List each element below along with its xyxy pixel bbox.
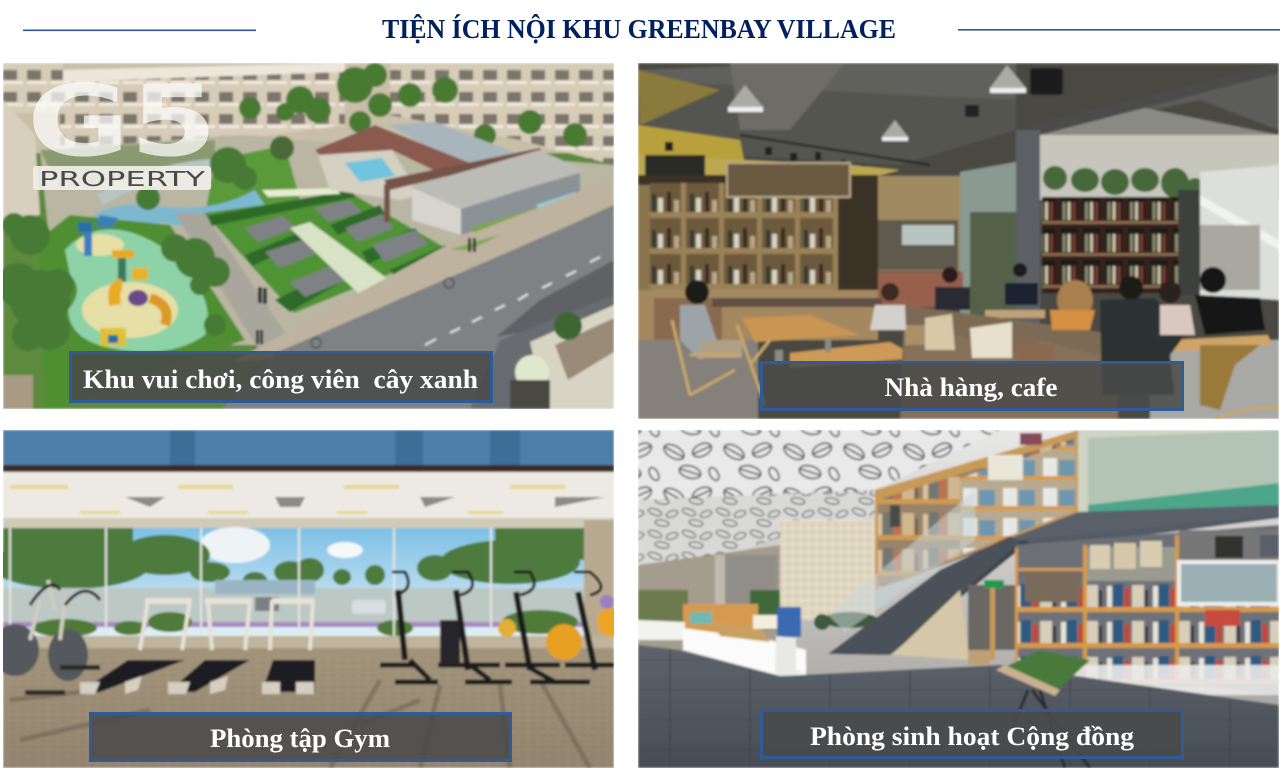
bottle garland — [1042, 164, 1202, 200]
track lights — [740, 135, 930, 165]
caption: Khu vui chơi, công viên cây xanh — [83, 365, 479, 394]
caption — [762, 710, 1182, 758]
sidewalk — [232, 178, 614, 362]
garden lawn — [204, 193, 449, 313]
road — [222, 206, 614, 409]
mezzanine glass and teal band — [1078, 430, 1279, 515]
exercise bikes — [0, 580, 100, 695]
exercise balls — [546, 624, 582, 660]
diners — [680, 263, 1265, 410]
wainscot and carpet — [3, 636, 614, 650]
mezzanine beam — [1012, 505, 1279, 552]
caption: Phòng sinh hoạt Cộng đồng — [810, 722, 1134, 751]
right title rule — [958, 29, 1280, 31]
slate floor — [638, 645, 1279, 768]
caption: Nhà hàng, cafe — [884, 373, 1058, 402]
stair glass — [828, 490, 975, 632]
ceiling — [638, 84, 1016, 164]
panel: community room — [638, 430, 1279, 768]
treadmills — [80, 598, 315, 694]
wine shelf — [1042, 197, 1178, 293]
stair shrub — [822, 612, 878, 628]
garden hedges and seating — [207, 188, 450, 312]
left title rule — [23, 30, 256, 31]
caption — [90, 714, 510, 760]
clubhouse with pool and glass dome — [270, 122, 584, 238]
pendant lamps — [728, 85, 763, 107]
caption — [70, 352, 492, 402]
playground equipment — [78, 215, 167, 346]
lower bookcase — [1015, 525, 1279, 695]
stone walkway — [175, 213, 290, 355]
ceiling — [3, 472, 614, 522]
tables — [742, 315, 860, 342]
playground surface — [65, 229, 208, 352]
caption — [762, 362, 1182, 410]
restaurant interior photo — [638, 63, 1280, 419]
aerial illustration of the park — [0, 63, 614, 409]
tree canopies — [0, 147, 257, 351]
open book on stand — [996, 650, 1090, 768]
stair — [832, 540, 1030, 655]
title: TIỆN ÍCH NỘI KHU GREENBAY VILLAGE — [382, 14, 896, 44]
blue facade band — [3, 430, 614, 466]
soffit lit wall — [638, 155, 900, 176]
gym interior render — [0, 430, 627, 768]
window bay — [960, 162, 1016, 340]
right window — [1200, 165, 1279, 300]
panel: restaurant and cafe — [638, 63, 1280, 419]
counter — [638, 290, 878, 340]
mullions — [9, 528, 492, 636]
back of hall — [638, 545, 780, 650]
wood panel — [878, 176, 960, 271]
floor — [638, 340, 758, 419]
pedestrians and cyclists — [256, 238, 476, 348]
leaf ceiling — [638, 430, 1000, 560]
orange display and white tables — [683, 604, 758, 634]
community library photo — [638, 430, 1279, 768]
rattan chairs — [672, 320, 1279, 419]
upper right wall — [1040, 135, 1280, 200]
background trees — [239, 63, 587, 147]
logo: G5 — [27, 65, 217, 179]
window view — [3, 528, 593, 636]
panel: gym — [0, 430, 627, 768]
water channel — [92, 188, 266, 226]
side lawn — [38, 215, 245, 409]
sofa with cushions — [901, 305, 1102, 361]
bar shelving — [638, 175, 878, 295]
upper bookcase — [875, 430, 1078, 590]
column — [1016, 130, 1040, 340]
dumbbell rack — [440, 620, 460, 665]
caption: Phòng tập Gym — [210, 724, 390, 753]
logo — [33, 82, 211, 190]
logo: PROPERTY — [39, 167, 206, 191]
under stair shelf and door — [892, 590, 970, 660]
pale ground — [40, 135, 614, 345]
steppers — [380, 572, 614, 682]
floor shadows — [10, 680, 590, 768]
corner villa and plant — [530, 305, 614, 409]
lane markings — [425, 257, 600, 345]
panel: park and green space — [0, 63, 614, 409]
